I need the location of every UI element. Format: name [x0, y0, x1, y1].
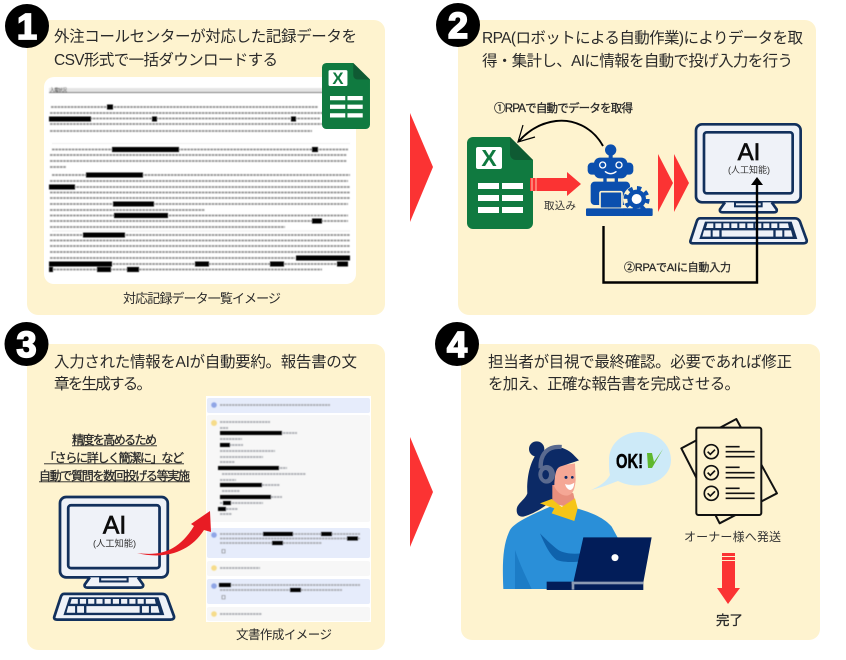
- panel 3: AI summary: [4, 322, 385, 650]
- icon: checklist: [681, 419, 777, 523]
- icon: AI computer: AI: [738, 139, 760, 166]
- chevrons: RPA to AI: [658, 154, 689, 212]
- step badge 3: 3: [16, 324, 37, 365]
- curved red arrow: AI to document: [137, 511, 211, 555]
- caption: document image: 文書作成イメージ: [236, 628, 332, 642]
- arrow: down to done: [717, 553, 740, 604]
- heading 3: 章を生成する。: [54, 375, 152, 393]
- icon: spreadsheet large: [467, 137, 533, 229]
- icon: AI computer: (人工知能): [728, 164, 770, 175]
- step badge 4: [435, 322, 479, 366]
- heading 2: 得・集計し、AIに情報を自動で投げ入力を行う: [482, 52, 793, 70]
- step badge 2: [436, 3, 480, 47]
- speech bubble: OK: OK!: [616, 451, 643, 473]
- step badge 1: [5, 4, 49, 48]
- heading 3: [54, 353, 357, 393]
- icon: spreadsheet large: X: [481, 145, 497, 171]
- document preview: call record list: [44, 77, 356, 284]
- label: done: 完了: [716, 613, 743, 628]
- curved arrow: robot to spreadsheet: [518, 121, 603, 146]
- heading 2: RPA(ロボットによる自動作業)によりデータを取: [482, 28, 803, 47]
- heading 1: 外注コールセンターが対応した記録データを: [54, 26, 357, 46]
- heading 4: 担当者が目視で最終確認。必要であれば修正: [488, 353, 792, 371]
- speech bubble: OK: [591, 432, 671, 490]
- heading 4: を加え、正確な報告書を完成させる。: [488, 375, 740, 393]
- panel 1: CSV download: [5, 4, 385, 315]
- step badge 4: 4: [447, 324, 467, 365]
- step badge 3: [4, 322, 48, 366]
- illustration: operator with laptop: [503, 441, 652, 590]
- chat document preview: [206, 396, 371, 622]
- panel 2: RPA input: [436, 3, 816, 315]
- heading 2: [482, 28, 803, 70]
- step badge 2: 2: [448, 5, 468, 46]
- icon: AI computer: (人工知能): [93, 537, 136, 548]
- panel 4: final check: [435, 322, 820, 640]
- note: repeated prompts for accuracy: 自動で質問を数回投げる等実施: [39, 468, 190, 483]
- document preview: call record list: 入電状況: [50, 86, 67, 94]
- heading 1: [54, 26, 357, 69]
- arrow: step 3 to step 4: [410, 437, 433, 547]
- icon: AI computer: AI: [103, 513, 126, 540]
- label: send to owner: オーナー様へ発送: [684, 529, 781, 544]
- note: repeated prompts for accuracy: [39, 433, 190, 483]
- arrow: import: [530, 172, 581, 196]
- icon: AI computer: [690, 124, 807, 243]
- label: import: 取込み: [544, 200, 576, 212]
- step badge 1: 1: [17, 6, 37, 47]
- heading 3: 入力された情報をAIが自動要約。報告書の文: [54, 353, 357, 371]
- note: repeated prompts for accuracy: 「さらに詳しく簡潔に」など: [44, 450, 184, 465]
- arrow: step 1 to step 2: [410, 113, 433, 222]
- caption: record list image: 対応記録データ一覧イメージ: [123, 291, 281, 306]
- heading 4: [488, 353, 792, 393]
- icon: spreadsheet small: X: [332, 69, 344, 88]
- heading 1: CSV形式で一括ダウンロードする: [54, 51, 278, 69]
- icon: robot: [586, 144, 653, 216]
- label: auto input to AI: ②RPAでAIに自動入力: [624, 260, 731, 274]
- icon: AI computer: [54, 497, 174, 620]
- elbow arrow: RPA to AI input: [604, 177, 763, 282]
- label: fetch data by RPA: ①RPAで自動でデータを取得: [494, 101, 633, 115]
- note: repeated prompts for accuracy: 精度を高めるため: [72, 433, 157, 447]
- icon: spreadsheet small: [322, 63, 370, 129]
